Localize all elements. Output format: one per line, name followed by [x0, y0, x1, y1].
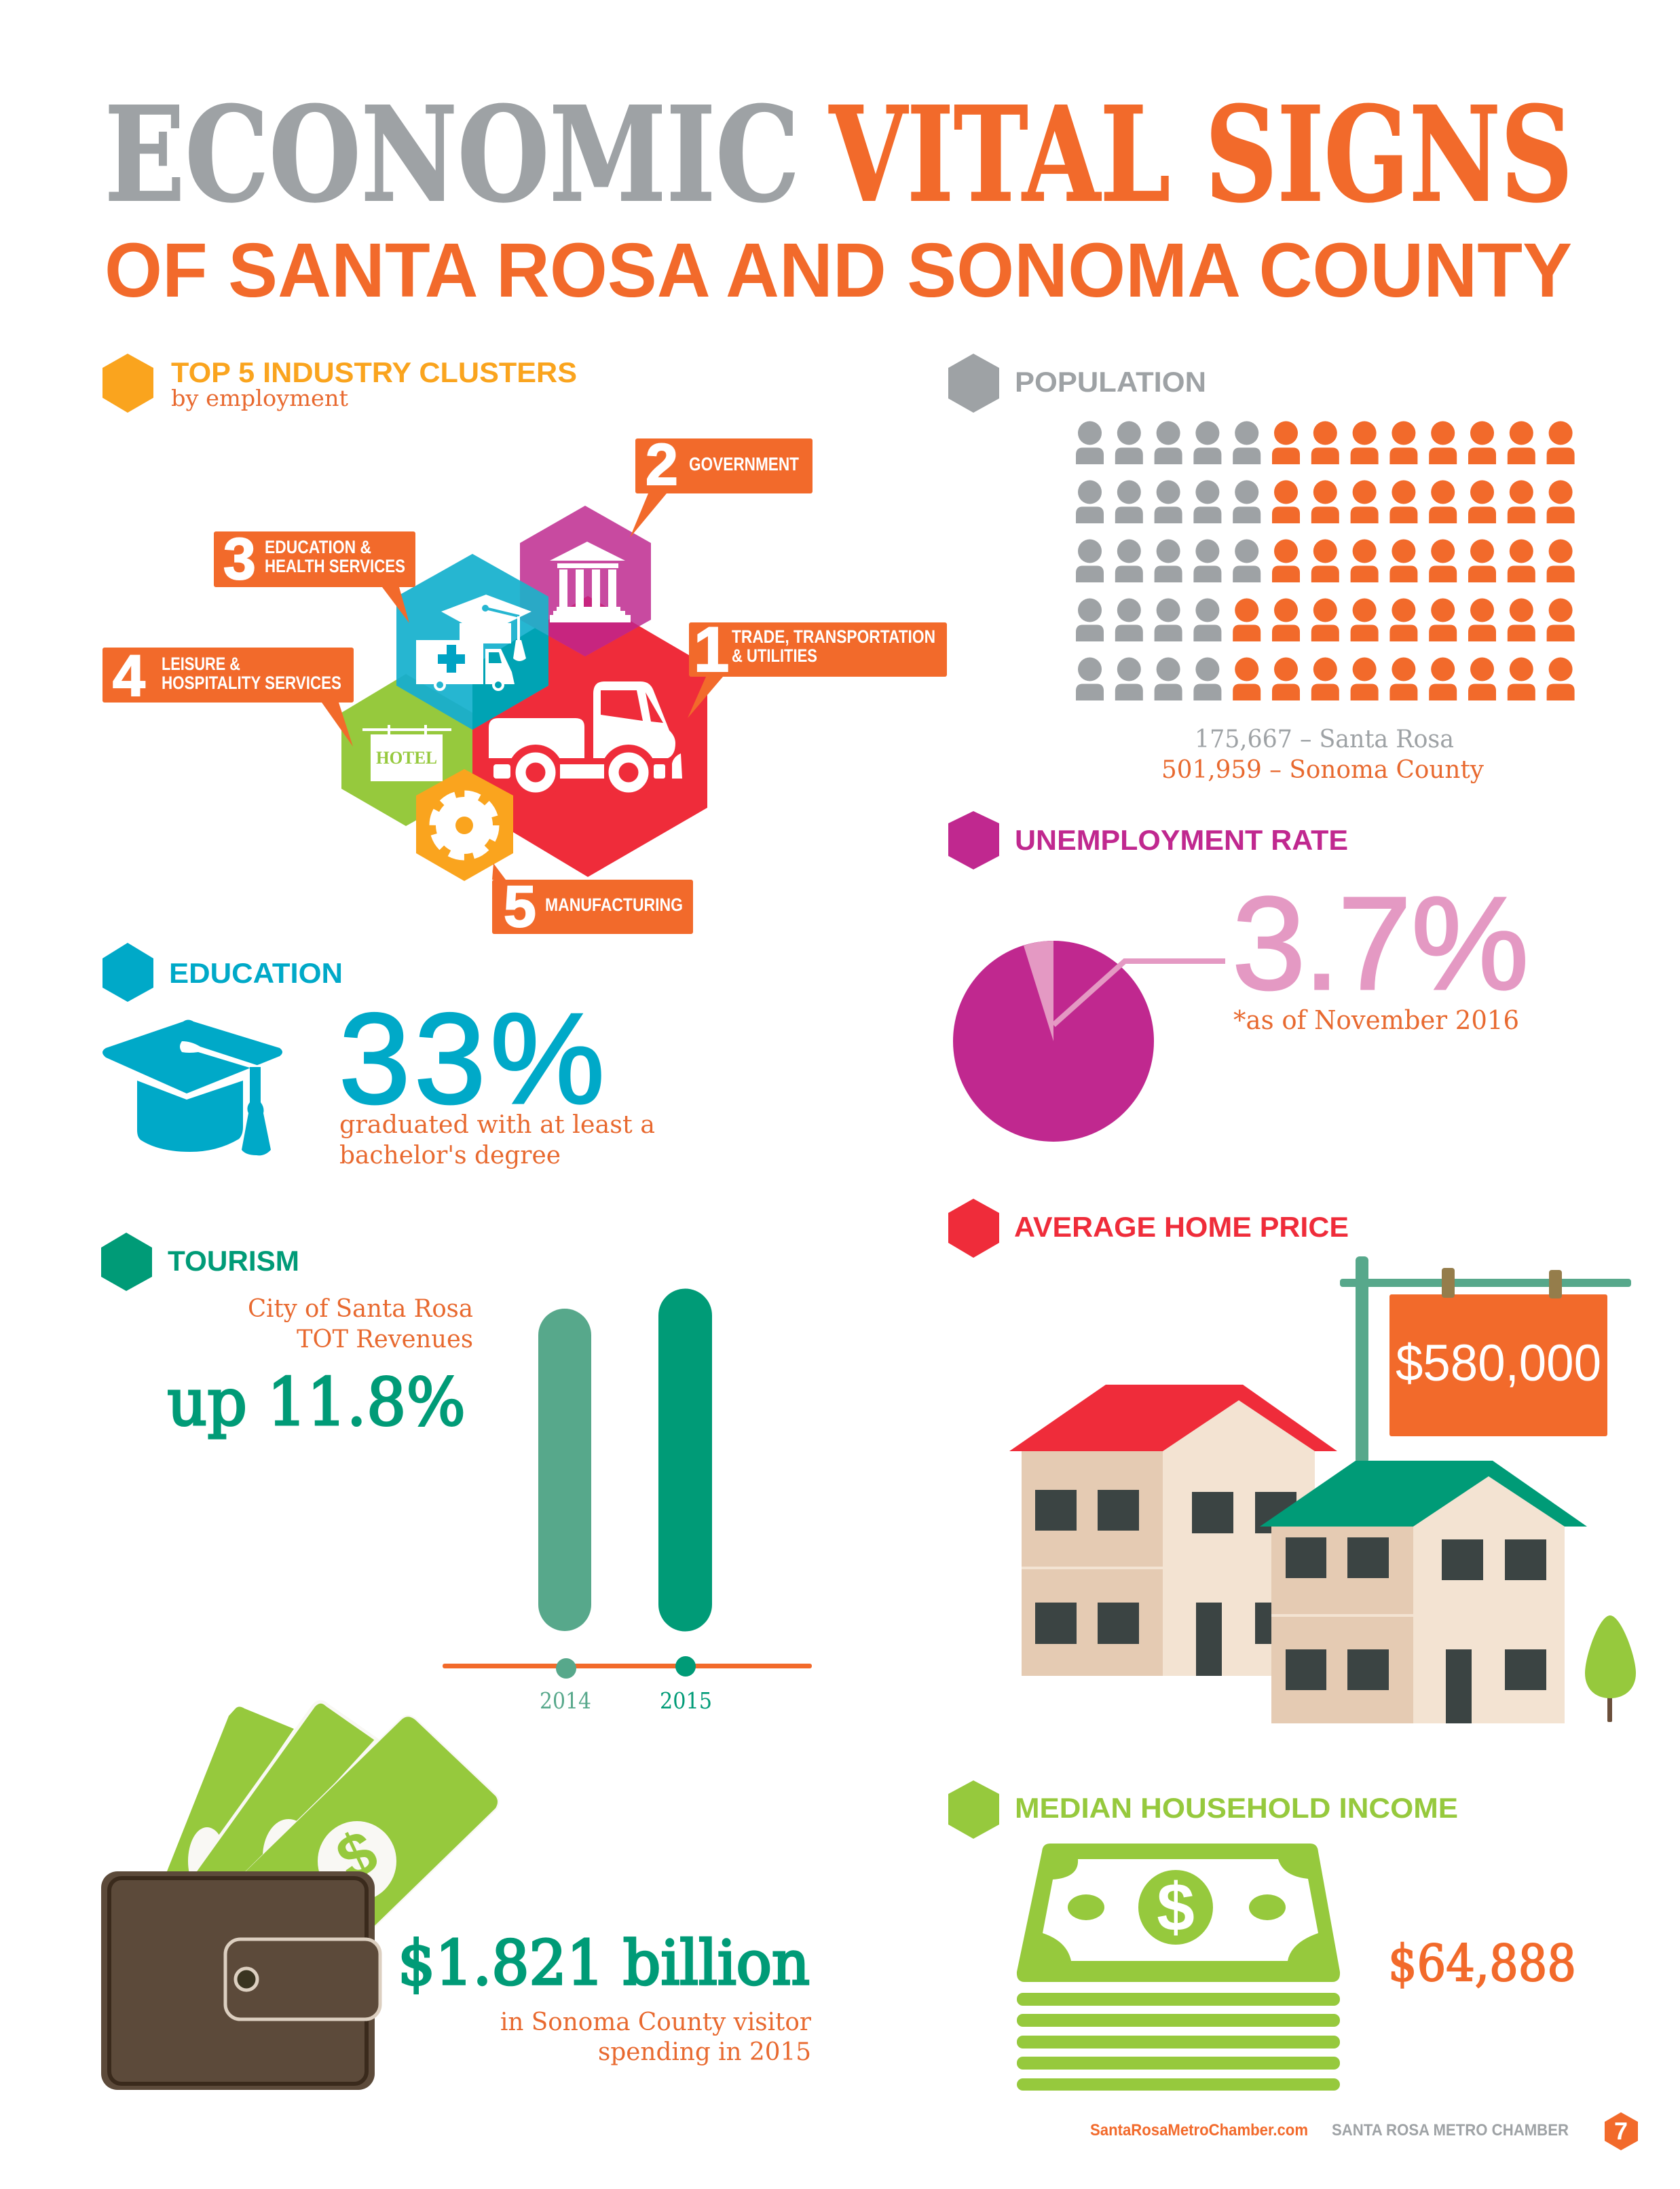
panel: average home price — [948, 1199, 1636, 1723]
subheading: by employment: by employment — [171, 385, 348, 411]
text: in sonoma county visitor spending in 2015: in Sonoma County visitor — [500, 2008, 812, 2036]
hexagon cluster — [341, 506, 707, 881]
heading: top 5 industry clusters: TOP 5 INDUSTRY CLUSTERS — [171, 356, 577, 388]
footer — [1090, 2112, 1638, 2150]
wallet body — [101, 1871, 375, 2090]
icon: magenta hexagon — [948, 811, 999, 869]
icon: gear — [434, 795, 495, 856]
axis — [443, 1664, 812, 1668]
callout 1: trade, transportation and utilities: 1 — [694, 614, 729, 685]
footer website: SantaRosaMetroChamber.com — [1090, 2121, 1308, 2139]
bill: back — [166, 1706, 294, 1895]
panel: education — [102, 943, 655, 1170]
heading: unemployment rate: UNEMPLOYMENT RATE — [1015, 824, 1348, 856]
heading: tourism: TOURISM — [168, 1245, 299, 1277]
callout 4: leisure and hospitality services: LEISURE & — [162, 654, 240, 674]
panel: unemployment rate — [948, 811, 1529, 1142]
panel: population — [948, 354, 1575, 784]
icon: graduation cap — [102, 1019, 282, 1155]
label: 2014: 2014 — [540, 1687, 591, 1714]
callout 1: trade, transportation and utilities — [688, 614, 947, 718]
icon: hotel sign — [362, 725, 451, 781]
callout 4: leisure and hospitality services: HOSPITALITY SERVICES — [162, 673, 341, 693]
bill: front — [244, 1717, 498, 1926]
icon: government building — [550, 542, 631, 622]
callout 1: trade, transportation and utilities: TRADE, TRANSPORTATION — [732, 626, 935, 647]
text: city of santa rosa tot revenues: City of Santa Rosa — [248, 1295, 473, 1323]
icon: wallet with bills — [101, 1702, 498, 2090]
bill: front: $ — [326, 1817, 388, 1894]
icon: graduation cap and ambulance — [416, 595, 531, 691]
page number hexagon — [1605, 2112, 1638, 2150]
stat: 64,888: $64,888 — [1388, 1934, 1576, 1993]
icon: amber hexagon — [102, 354, 153, 413]
heading: population: POPULATION — [1015, 366, 1206, 398]
bar: 2014 — [538, 1309, 591, 1631]
stat: 3.7 percent: 3.7% — [1232, 869, 1529, 1017]
hexagon: government purple — [520, 506, 651, 656]
heading: education: EDUCATION — [169, 957, 343, 989]
stat: 33 percent: 33% — [339, 987, 605, 1131]
title line 1 — [105, 79, 1573, 231]
bar: 2015 — [658, 1289, 712, 1632]
stat: 1.821 billion: $1.821 billion — [398, 1928, 810, 1999]
text: santa rosa population: 175,667 – Santa Rosa — [1195, 726, 1454, 753]
text: graduated with at least a bachelor's degree — [339, 1111, 655, 1170]
wallet clasp — [225, 1939, 380, 2019]
text: in sonoma county visitor spending in 2015: spending in 2015 — [598, 2038, 811, 2066]
callout 2: government — [630, 432, 813, 538]
illustration: for sale sign — [1340, 1256, 1631, 1463]
title — [105, 79, 1573, 313]
callout 2: government: 2 — [646, 432, 678, 498]
hexagon: leisure green — [341, 674, 472, 826]
marker: 2014 — [556, 1658, 576, 1679]
hexagon: trade red — [472, 596, 707, 877]
icon: hotel sign: HOTEL — [376, 748, 437, 768]
text: graduated with at least a bachelor's degree: bachelor's degree — [339, 1142, 561, 1170]
text: sonoma county population: 501,959 – Sonoma County — [1161, 756, 1485, 784]
illustration: tree — [1585, 1615, 1636, 1722]
callout 3: education and health services: 3 — [223, 527, 256, 592]
price: $580,000 — [1396, 1334, 1601, 1392]
illustration: green roof house — [1260, 1461, 1587, 1723]
page number hexagon: 7 — [1614, 2117, 1628, 2145]
icon: red hexagon — [948, 1199, 999, 1258]
heading: average home price: AVERAGE HOME PRICE — [1014, 1211, 1349, 1243]
wallet button — [236, 1968, 257, 1990]
callout 3: education and health services — [214, 527, 415, 623]
icon: lime hexagon — [948, 1780, 999, 1839]
callout 4: leisure and hospitality services: 4 — [113, 643, 145, 709]
callout 2: government: GOVERNMENT — [689, 453, 799, 474]
icon: banknote stack — [1017, 1844, 1340, 2091]
callout 5: manufacturing: MANUFACTURING — [545, 895, 683, 915]
pictogram: people grid — [1076, 421, 1575, 700]
text: in sonoma county visitor spending in 2015 — [500, 2008, 812, 2066]
bar chart: tot revenues — [443, 1289, 812, 1714]
leader line — [1053, 961, 1225, 1025]
hexagon: manufacturing amber — [416, 769, 513, 881]
icon: blue hexagon — [102, 943, 153, 1002]
callout 3: education and health services: HEALTH SERVICES — [265, 556, 405, 576]
title line 1: ECONOMIC — [105, 79, 800, 231]
callout 5: manufacturing — [492, 863, 693, 939]
hexagon: education blue — [396, 554, 548, 730]
title line 2: OF SANTA ROSA AND SONOMA COUNTY — [105, 227, 1572, 313]
panel: top 5 industry clusters — [102, 354, 947, 939]
panel: median household income — [948, 1780, 1576, 2091]
bill: middle — [191, 1702, 377, 1894]
marker: 2015 — [675, 1656, 696, 1677]
text: city of santa rosa tot revenues — [248, 1295, 473, 1353]
text: graduated with at least a bachelor's degree: graduated with at least a — [339, 1111, 655, 1139]
illustration: red roof house — [1009, 1385, 1337, 1676]
wallet stitching — [109, 1878, 367, 2084]
callout 3: education and health services: EDUCATION & — [265, 537, 371, 557]
icon: banknote stack: $ — [1157, 1869, 1195, 1945]
panel: tourism — [101, 1233, 812, 2090]
label: 2015: 2015 — [660, 1687, 712, 1714]
text: city of santa rosa tot revenues: TOT Revenues — [297, 1326, 473, 1353]
callout 5: manufacturing: 5 — [504, 874, 536, 939]
stat: up 11.8 percent: up 11.8% — [167, 1364, 466, 1440]
icon: grey hexagon — [948, 354, 999, 413]
callout 4: leisure and hospitality services — [102, 643, 354, 747]
pie chart — [953, 941, 1225, 1142]
icon: truck — [489, 681, 682, 800]
callout 1: trade, transportation and utilities: & UTILITIES — [732, 646, 817, 666]
footer organisation: SANTA ROSA METRO CHAMBER — [1332, 2121, 1569, 2139]
heading: median household income: MEDIAN HOUSEHOLD INCOME — [1015, 1792, 1458, 1824]
note: as of november 2016: *as of November 2016 — [1233, 1005, 1519, 1035]
icon: green hexagon — [101, 1233, 152, 1291]
